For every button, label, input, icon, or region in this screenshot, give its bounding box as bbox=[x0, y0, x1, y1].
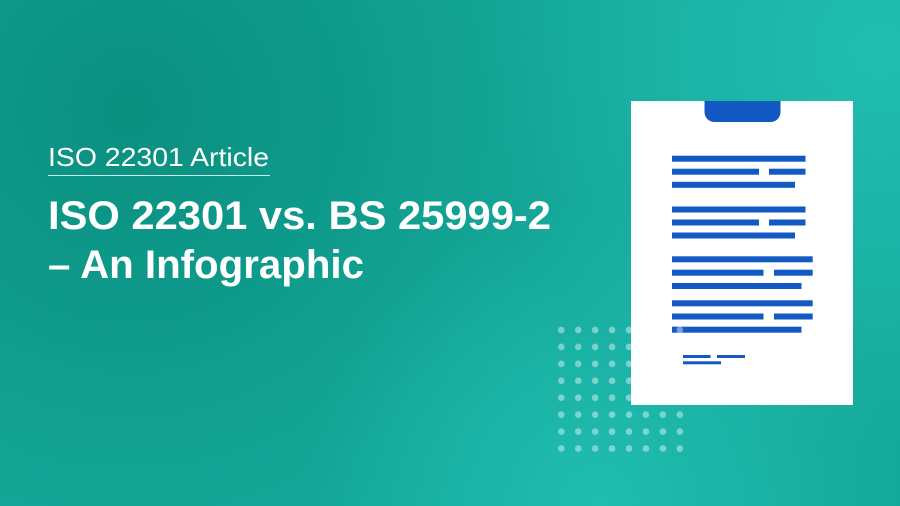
signature lines bbox=[683, 355, 745, 364]
title bbox=[48, 194, 551, 287]
title: – An Infographic bbox=[48, 243, 364, 287]
text lines: first paragraph bbox=[672, 156, 806, 188]
text lines: second paragraph bbox=[672, 206, 806, 238]
text lines: fourth paragraph bbox=[672, 300, 813, 333]
title: ISO 22301 vs. BS 25999-2 bbox=[48, 194, 551, 238]
clipboard clip bbox=[704, 101, 780, 122]
text lines: third paragraph bbox=[672, 256, 813, 289]
dot grid pattern bbox=[553, 322, 688, 457]
icon: document on clipboard bbox=[631, 101, 853, 405]
eyebrow: article category: ISO 22301 Article bbox=[48, 142, 269, 172]
